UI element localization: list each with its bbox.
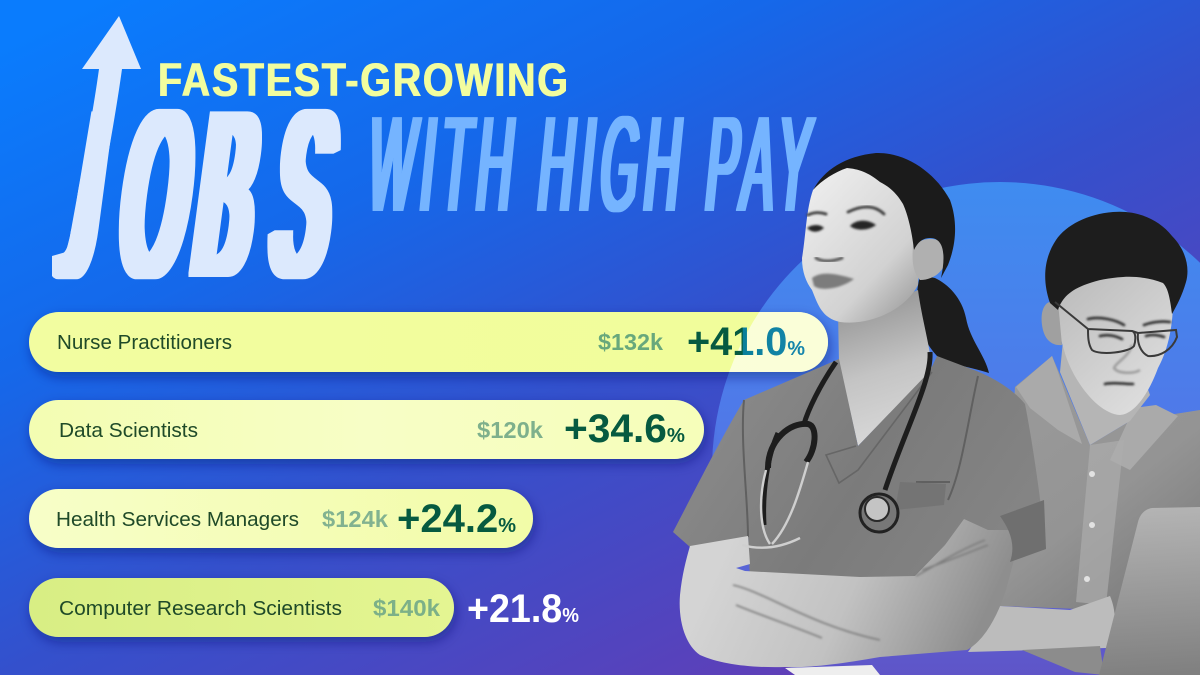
crossed arms and hands — [680, 519, 1022, 667]
scrubs — [673, 356, 1046, 590]
salary: $132k — [598, 329, 664, 355]
title word: JOBS — [52, 108, 341, 280]
row: health services managers — [29, 489, 533, 548]
title word: JOBS: J — [43, 63, 117, 326]
background disc behind people — [712, 182, 1200, 675]
earpiece arc — [768, 424, 815, 468]
job name: Computer Research Scientists — [59, 597, 342, 620]
shirt collar — [1016, 356, 1178, 470]
glasses — [1055, 302, 1177, 356]
eyes — [807, 221, 876, 232]
laptop lid — [1099, 507, 1200, 675]
laptop base — [1022, 646, 1104, 675]
ear — [913, 239, 947, 280]
neck — [838, 290, 932, 446]
stethoscope — [742, 352, 930, 548]
neck — [1060, 330, 1150, 445]
row: nurse practitioners — [29, 312, 828, 372]
forearm fold lines — [733, 540, 988, 640]
tube — [764, 352, 930, 525]
title word: JOBS: O — [109, 63, 205, 326]
binaural wires — [742, 462, 808, 548]
row: data scientists — [29, 400, 704, 459]
eyebrows — [808, 207, 884, 215]
nose — [816, 258, 842, 261]
ear — [1042, 301, 1062, 345]
eyebrows, eyes and mouth — [1088, 318, 1170, 384]
bar — [29, 578, 454, 637]
shirt placket and buttons — [1076, 440, 1124, 605]
ponytail — [917, 275, 989, 373]
forearm and hands — [968, 596, 1115, 652]
icon: upward arrow forming the J — [52, 16, 141, 275]
v-neck trim — [826, 372, 932, 483]
growth rate: +24.2% — [397, 497, 516, 541]
bar — [29, 312, 828, 372]
sleeve seam — [743, 376, 978, 537]
chest piece — [860, 494, 898, 532]
job name: Data Scientists — [59, 419, 198, 442]
title — [52, 16, 817, 280]
bar — [29, 400, 704, 459]
nose — [1114, 345, 1140, 373]
photo: nurse with stethoscope — [673, 153, 1046, 667]
right sleeve cuff — [1000, 500, 1046, 562]
job name: Nurse Practitioners — [57, 331, 232, 354]
photo: man with laptop — [968, 212, 1200, 675]
lips — [812, 274, 854, 289]
bar — [29, 489, 533, 548]
title line: with high pay: WITH HIGH PAY — [362, 89, 818, 240]
disc tint over bar end — [729, 312, 828, 372]
title line: fastest-growing: FASTEST-GROWING — [158, 55, 568, 107]
title word: JOBS: B — [184, 63, 271, 326]
salary: $124k — [322, 506, 389, 532]
salary: $140k — [373, 595, 441, 621]
breast pocket — [895, 482, 946, 510]
salary: $120k — [477, 417, 544, 443]
growth rate: +21.8% — [467, 587, 579, 631]
row: computer research scientists — [29, 578, 579, 637]
face — [802, 165, 920, 323]
face — [1054, 262, 1173, 415]
growth rate: +34.6% — [564, 407, 685, 451]
hair — [813, 153, 955, 278]
growth rate: +41.0% — [687, 320, 805, 364]
job name: Health Services Managers — [56, 508, 299, 531]
bottom light wedge — [785, 665, 880, 675]
title word: JOBS: S — [261, 63, 348, 326]
hair — [1045, 212, 1187, 314]
shirt — [1000, 356, 1200, 675]
